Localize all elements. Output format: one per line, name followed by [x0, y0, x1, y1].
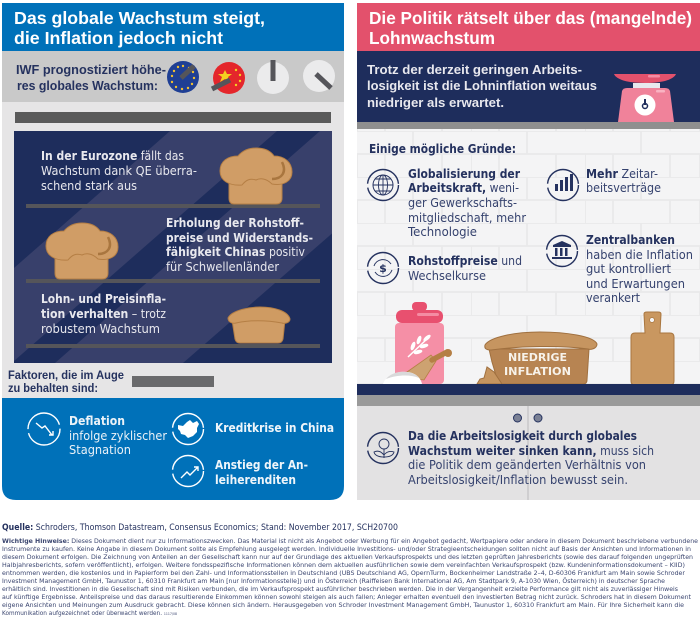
icon: china dial	[212, 62, 245, 94]
icon: bar chart	[548, 170, 578, 200]
text: conclusion: die Politik dem geänderten Verhältnis von	[408, 458, 646, 472]
text: eurozone: schend stark aus	[41, 179, 137, 193]
disclaimer: diesem Dokument erfolgen. Die Zeichnung von Anteilen an der Gesellschaft kann nur auf der Grundlage des aktuellen Verkaufsprospekts und des letzten geprüften Jahresberichts (sowie des darauf folgenden ungeprüften	[2, 553, 693, 561]
panel: global growth: zu behalten sind:	[8, 383, 98, 395]
text: central banks: und Erwartungen	[586, 277, 685, 291]
source line: Quelle: Schroders, Thomson Datastream, Consensus Economics; Stand: November 2017, SCH20700	[2, 523, 398, 533]
text: conclusion: Da die Arbeitslosigkeit durch globales	[408, 429, 637, 443]
disclaimer: eigene Ansichten und Meinungen zum Ausdruck gebracht. Diese können sich ändern. Herausgegeben von Schroder Investment Management GmbH, Taunustor 1, 60310 Frankfurt am Main. Für Ihre Sicherheit kann die	[2, 601, 684, 609]
text: central banks: verankert	[586, 291, 640, 305]
heading: wage growth	[357, 3, 700, 51]
icon: risen bread	[220, 148, 292, 204]
text: central banks: haben die Inflation	[586, 248, 693, 262]
icon: flat loaf	[228, 307, 290, 343]
disclaimer: entnommen werden, die kostenlos und in Papierform bei den Zahl- und Informationsstellen in Deutschland (UBS Deutschland AG, OpernTurm, Bockenheimer Landstraße 2–4, D-60306 Frankfurt am Main sowie Schroder	[2, 569, 685, 577]
text: eurozone: Wachstum dank QE überra-	[41, 164, 197, 178]
text: central banks: gut kontrolliert	[586, 262, 671, 276]
text: eurozone	[41, 149, 197, 193]
text: central banks	[586, 233, 693, 305]
icon: loaf of bread: INFLATION	[504, 365, 571, 378]
panel: shelves	[14, 131, 332, 363]
text: wage inflation: tion verhalten – trotz	[41, 307, 166, 321]
icon: cutting board	[631, 312, 674, 385]
text: globalisation: ger Gewerkschafts-	[408, 196, 517, 210]
panel: wage growth	[357, 3, 700, 500]
icon: currency: $	[379, 262, 387, 275]
icon: globe	[368, 170, 398, 200]
icon: plant and coin	[368, 432, 398, 464]
text: deflation: infolge zyklischer	[69, 429, 167, 443]
icon: currency	[368, 252, 398, 284]
text: wage inflation: robustem Wachstum	[41, 322, 160, 336]
heading: reasons: Einige mögliche Gründe:	[369, 142, 516, 156]
band: IMF forecast: IWF prognostiziert höhe-	[16, 63, 166, 77]
text: commodities: fähigkeit Chinas positiv	[166, 245, 305, 259]
text: deflation: Deflation	[69, 414, 125, 428]
icon: loaf of bread: NIEDRIGE	[508, 351, 567, 364]
heading: factors: Faktoren, die im Auge	[8, 370, 124, 382]
icon: flour jar	[383, 302, 452, 384]
icon: kitchen scale	[614, 74, 676, 122]
text: bond yields	[215, 458, 308, 487]
text: commodities: Erholung der Rohstoff-	[166, 216, 304, 230]
text: commodities: preise und Widerstands-	[166, 231, 313, 245]
text: central banks: Zentralbanken	[586, 233, 675, 247]
text: globalisation: Arbeitskraft, weni-	[408, 181, 519, 195]
text: commodity prices: Rohstoffpreise und	[408, 254, 522, 268]
band: wage inflation statement: niedriger als erwartet.	[367, 96, 504, 110]
text: credit crisis: Kreditkrise in China	[215, 421, 334, 435]
text: commodities: für Schwellenländer	[166, 260, 279, 274]
icon: dial up	[257, 60, 289, 94]
disclaimer: erhältlich sind. Investitionen in die Gesellschaft sind mit Risiken verbunden, die im Verkaufsprospekt ausführlicher beschrieben werden. Die in der Vergangenheit erzielte Performance gilt nicht als zuverlässiger Hinweis	[2, 585, 679, 593]
text: conclusion: Wachstum weiter sinken kann, muss sich	[408, 444, 654, 458]
text: commodities	[166, 216, 313, 274]
icon: china map	[172, 414, 204, 444]
redaction bar	[132, 376, 214, 387]
heading: global growth: die Inflation jedoch nicht	[14, 28, 223, 48]
icon: dial right	[303, 60, 335, 92]
text: deflation: Stagnation	[69, 443, 131, 457]
text: eurozone: In der Eurozone fällt das	[41, 149, 184, 163]
text: deflation	[69, 414, 167, 457]
disclaimer: Kommunikation aufgezeichnet oder überwacht werden. 1117/08	[2, 609, 177, 617]
disclaimer	[2, 537, 698, 617]
text: commodity prices: Wechselkurse	[408, 269, 486, 283]
panel: risks	[2, 398, 344, 500]
icon: deflation	[28, 413, 60, 445]
text: bond yields: Anstieg der An-	[215, 458, 308, 472]
heading: global growth	[2, 3, 344, 51]
text: temporary contracts	[586, 167, 661, 195]
redaction bar	[15, 112, 331, 123]
band: wage inflation statement	[357, 51, 700, 129]
text: globalisation	[407, 167, 526, 239]
text: globalisation: Globalisierung der	[408, 167, 520, 181]
icon: rising chart	[172, 456, 204, 486]
text: conclusion	[408, 429, 654, 487]
disclaimer: Wichtige Hinweise: Dieses Dokument dient nur zu Informationszwecken. Das Material ist nicht als Angebot oder Werbung für ein Angebot gedacht, Wertpapiere oder andere in diesem Dokument beschriebene verbundene	[2, 537, 698, 545]
icon: cabinet knobs	[514, 414, 542, 422]
text: commodity prices	[408, 254, 522, 283]
wall: bricks	[357, 129, 700, 385]
icon: loaf of bread	[477, 332, 597, 384]
text: conclusion: Arbeitslosigkeit/Inflation bewusst sein.	[408, 473, 628, 487]
icon: risen bread	[46, 223, 118, 279]
text: globalisation: mitgliedschaft, mehr	[408, 211, 526, 225]
band: IMF forecast	[2, 51, 344, 102]
heading: wage growth: Lohnwachstum	[369, 28, 495, 48]
icon: euro dial	[167, 61, 199, 93]
heading: wage growth: Die Politik rätselt über das (mangelnde)	[369, 8, 692, 28]
text: globalisation: Technologie	[407, 225, 477, 239]
text: wage inflation: Lohn- und Preisinfla-	[41, 292, 166, 306]
disclaimer: Instrumente zu kaufen. Keine Angabe in diesem Dokument sollte als Empfehlung ausgelegt werden. Individuelle Investitions- und/oder Strategieentscheidungen sollten nicht auf Basis der Ansichten und Informationen in	[2, 545, 691, 553]
text: temporary contracts: Mehr Zeitar-	[586, 167, 658, 181]
band: IMF forecast: res globales Wachstum:	[17, 79, 158, 93]
disclaimer: auf künftige Ergebnisse. Anteilspreise und das daraus resultierende Einkommen können sowohl steigen als auch fallen; Anleger erhalten eventuell den investierten Betrag nicht zurück. Schroders hat in diesem Dokument	[2, 593, 691, 601]
heading: global growth: Das globale Wachstum steigt,	[14, 8, 265, 28]
disclaimer: Investment Management GmbH, Taunustor 1, 60310 Frankfurt am Main [nur Informationsstelle]) und in Österreich (Raiffeisen Bank International AG, Am Stadtpark 9, A-1030 Wien, Österreich) in deutscher Sprache	[2, 576, 665, 585]
text: wage inflation	[41, 292, 166, 336]
panel: global growth	[2, 3, 344, 500]
band: wage inflation statement: Trotz der derzeit geringen Arbeits-	[367, 63, 582, 77]
icon: bank	[546, 236, 578, 266]
band: wage inflation statement: losigkeit ist die Lohninflation weitaus	[367, 79, 597, 93]
counter	[357, 384, 700, 406]
cabinet: conclusion	[357, 406, 700, 500]
disclaimer: Halbjahresberichts, sofern veröffentlicht), erfolgen. Weitere fondsspezifische Informationen können dem aktuellen ausführlichen sowie dem vereinfachten Verkaufsprospekt (bzw. Kundeninformationsdokument – KIID)	[2, 561, 685, 569]
text: bond yields: leiherenditen	[215, 473, 296, 487]
text: temporary contracts: beitsverträge	[586, 181, 661, 195]
